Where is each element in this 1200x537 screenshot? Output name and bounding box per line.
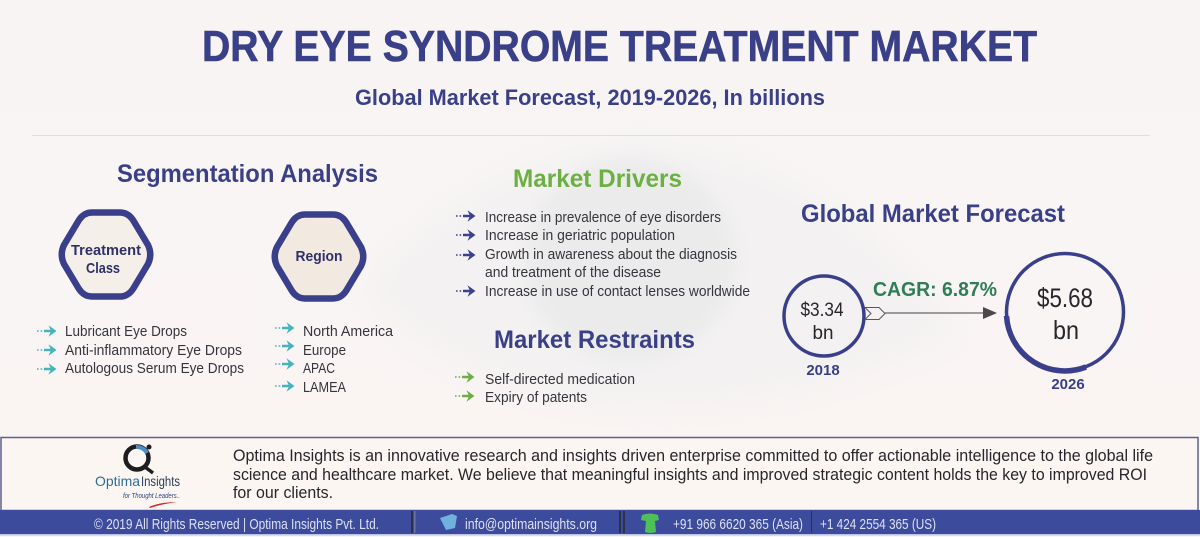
- list: drivers: [456, 210, 750, 300]
- panel: market drivers: [456, 165, 750, 300]
- logo: Optima Insights: for Thought Leaders..: [123, 493, 180, 500]
- list: treatment classes: Lubricant Eye Drops: [65, 324, 187, 340]
- hexagon: treatment class: Treatment: [71, 242, 141, 259]
- list: drivers: Increase in prevalence of eye disorders: [485, 210, 721, 226]
- title: DRY EYE SYNDROME TREATMENT MARKET: [202, 22, 1037, 71]
- list: restraints: Self-directed medication: [485, 372, 635, 388]
- circle: 2026 value: 2026: [1051, 376, 1085, 393]
- logo: Optima Insights: Optima: [95, 473, 140, 489]
- circle: 2018 value: $3.34: [800, 300, 844, 321]
- list: drivers: Increase in geriatric population: [485, 228, 675, 244]
- arrow with CAGR: CAGR: 6.87%: [873, 279, 997, 301]
- list: regions: [275, 322, 394, 396]
- heading: market drivers: Market Drivers: [513, 165, 682, 193]
- list: regions: LAMEA: [303, 380, 346, 396]
- circle: 2018 value: bn: [812, 323, 834, 344]
- footer: Asia phone: +91 966 6620 365 (Asia): [673, 516, 803, 533]
- panel: market restraints: [455, 326, 695, 406]
- list: drivers: and treatment of the disease: [485, 265, 661, 281]
- circle: 2018 value: 2018: [806, 362, 840, 379]
- list: restraints: Expiry of patents: [485, 390, 587, 406]
- hexagon: treatment class: [62, 212, 150, 296]
- footer: copyright: © 2019 All Rights Reserved | Optima Insights Pvt. Ltd.: [94, 516, 379, 533]
- hexagon: region: [275, 214, 363, 298]
- list: treatment classes: Anti-inflammatory Eye Drops: [65, 343, 242, 359]
- list: regions: North America: [303, 324, 394, 340]
- list: treatment classes: Autologous Serum Eye Drops: [65, 361, 244, 377]
- circle: 2026 value: $5.68: [1037, 283, 1093, 313]
- footer: email: info@optimainsights.org: [465, 516, 597, 533]
- company description: for our clients.: [233, 483, 333, 502]
- footer bar: [0, 510, 1200, 536]
- footer: US phone: +1 424 2554 365 (US): [820, 516, 936, 533]
- list: regions: APAC: [303, 361, 335, 377]
- logo: Optima Insights: [95, 444, 180, 508]
- icon: phone: [641, 514, 659, 533]
- company description: Optima Insights is an innovative research and insights driven enterprise committed to offer actionable intelligence to the global life: [233, 446, 1153, 465]
- company description: science and healthcare market. We believe that meaningful insights and improved strategic content holds the key to improved ROI: [233, 465, 1147, 484]
- logo: Optima Insights: Insights: [141, 473, 180, 489]
- heading: market restraints: Market Restraints: [494, 326, 695, 354]
- circle: 2026 value: bn: [1053, 315, 1079, 345]
- panel: segmentation analysis: [37, 160, 394, 396]
- heading: global market forecast: Global Market Forecast: [801, 200, 1066, 228]
- heading: segmentation analysis: Segmentation Analysis: [117, 160, 378, 188]
- panel: global market forecast: [784, 200, 1124, 393]
- list: drivers: Increase in use of contact lenses worldwide: [485, 284, 750, 300]
- icon: email: [440, 514, 457, 530]
- subtitle: Global Market Forecast, 2019-2026, In billions: [355, 85, 825, 110]
- panel: about box: [1, 438, 1198, 510]
- hexagon: treatment class: Class: [86, 260, 120, 277]
- circle: 2018 value: [784, 276, 864, 379]
- hexagon: region: Region: [296, 248, 342, 265]
- list: regions: Europe: [303, 343, 346, 359]
- list: restraints: [455, 371, 635, 406]
- circle: 2026 value: [1006, 254, 1124, 393]
- company description: [233, 446, 1153, 502]
- arrow with CAGR: [865, 279, 997, 320]
- list: drivers: Growth in awareness about the diagnosis: [485, 247, 737, 263]
- list: treatment classes: [37, 324, 244, 377]
